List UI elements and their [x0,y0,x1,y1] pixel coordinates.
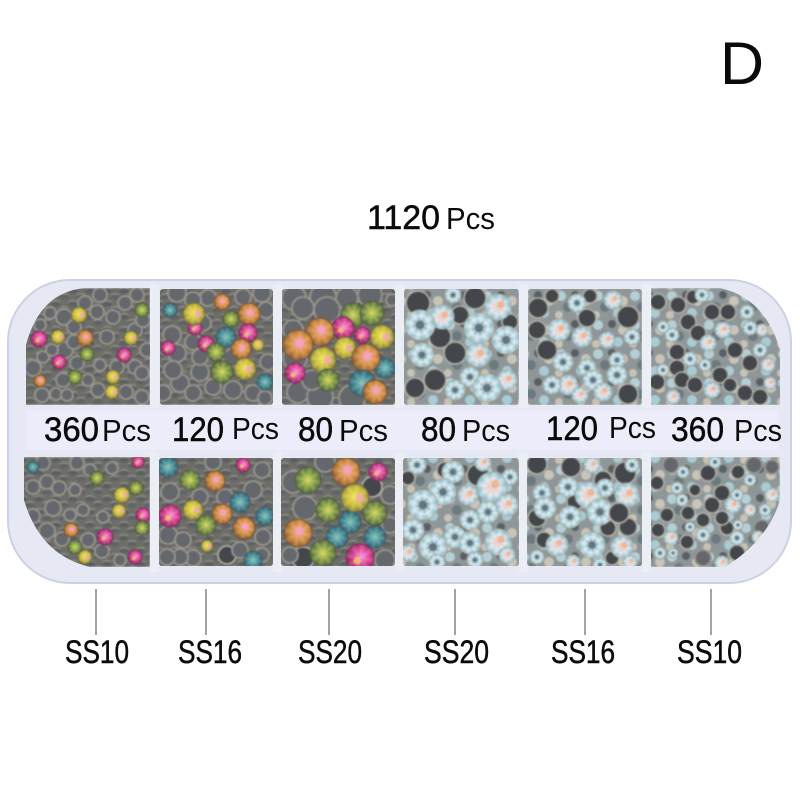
heading: total 1120 Pcs [367,199,495,237]
label row: piece counts: Pcs [102,413,151,448]
compartment: top row 2, SS16 volcano [160,289,273,405]
compartment: top row 1, SS10 volcano [22,288,154,405]
compartment: bottom row 6, SS10 crystal AB [650,456,780,570]
heading: total 1120 Pcs: 1120 [367,199,440,237]
size callout: SS10 right: SS10 [677,634,742,670]
size callout: SS20 right: SS20 [424,634,489,670]
label row: piece counts: 80 [421,411,456,449]
label row: piece counts: 360 [671,411,724,449]
size callout: SS10 left [65,589,129,670]
label row: piece counts [44,410,782,449]
compartment: bottom row 4, SS20 crystal AB [400,455,520,570]
size callout: SS16 left [178,589,242,670]
label row: piece counts: Pcs [232,411,279,446]
size callout: SS16 right: SS16 [551,634,615,670]
size callout: SS20 left [298,589,362,670]
size callout: SS10 right [677,589,742,670]
label row: piece counts: Pcs [339,413,388,448]
panel: plastic tray [8,280,791,583]
compartment: bottom row 1, SS10 volcano [22,456,150,567]
label: letter D: D [720,30,764,97]
compartment: bottom row 2, SS16 volcano [158,454,274,569]
compartment: top row 5, SS16 crystal AB [527,288,642,405]
compartment: top row 6, SS10 crystal AB [649,288,781,405]
label row: piece counts: 120 [546,410,598,448]
heading: total 1120 Pcs: Pcs [446,201,495,236]
size callout: SS16 left: SS16 [178,634,242,670]
compartment: bottom row 5, SS16 crystal AB [527,458,642,566]
size callout: SS10 left: SS10 [65,634,129,670]
label row: piece counts: 80 [298,411,333,449]
label row: piece counts: Pcs [609,410,656,445]
compartment: top row 3, SS20 volcano [282,289,395,405]
label row: piece counts: 120 [172,411,224,449]
size callout: SS20 right [424,589,489,670]
label row: piece counts: Pcs [462,413,510,448]
size callout: SS16 right [551,589,615,670]
label row: piece counts: 360 [44,411,99,449]
label row: piece counts: Pcs [734,413,782,448]
size callout: SS20 left: SS20 [298,634,362,670]
compartment: bottom row 3, SS20 volcano [281,458,395,566]
compartment: top row 4, SS20 crystal AB [403,287,520,405]
